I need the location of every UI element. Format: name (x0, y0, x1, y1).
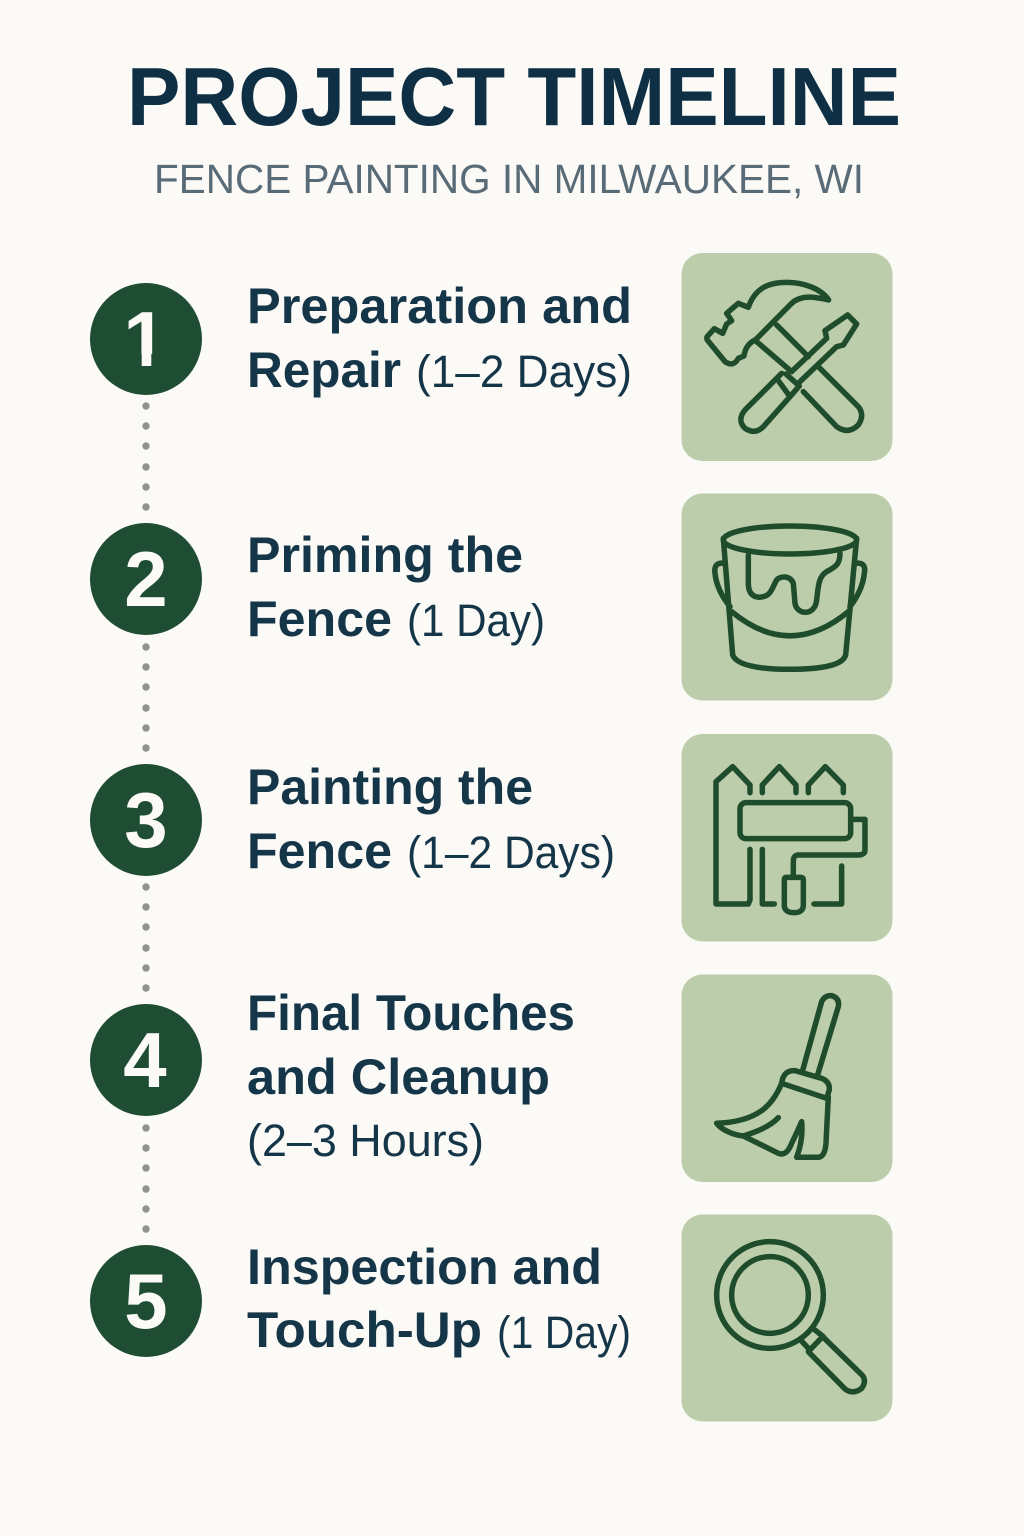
step 4 text: and Cleanup (247, 1049, 550, 1105)
title: PROJECT TIMELINE (127, 50, 901, 143)
step 5 text: (1 Day) (497, 1307, 631, 1358)
step 1 text: Preparation and (247, 278, 632, 334)
step 5 text (247, 1239, 631, 1358)
step 5 number badge (90, 1245, 202, 1357)
step 3 number badge (90, 764, 202, 876)
dotted connector 1-2 (142, 402, 150, 511)
subtitle: FENCE PAINTING IN MILWAUKEE, WI (154, 156, 864, 202)
step 5 icon card: magnifying glass (682, 1214, 892, 1422)
step 4 number badge: 4 (123, 1016, 167, 1104)
step 4 icon card: broom (682, 974, 892, 1182)
dotted connector 3-4 (142, 883, 150, 992)
step 1 number badge: 1 (123, 295, 167, 383)
step 5 text: Inspection and (247, 1239, 602, 1295)
dotted connector 4-5 (142, 1124, 150, 1233)
step 1 number badge (90, 283, 202, 395)
step 3 text (247, 759, 615, 879)
step 2 text (247, 527, 545, 647)
step 3 text: (1–2 Days) (407, 827, 615, 878)
step 2 text: Fence (247, 591, 392, 647)
step 3 text: Painting the (247, 759, 533, 815)
step 1 icon card: hammer and screwdriver (682, 253, 892, 461)
dotted connector 2-3 (142, 643, 150, 752)
step 3 number badge: 3 (124, 776, 168, 864)
step 3 text: Fence (247, 823, 392, 879)
step 2 number badge: 2 (124, 535, 168, 623)
step 5 number badge: 5 (124, 1257, 168, 1345)
step 4 text: (2–3 Hours) (247, 1115, 484, 1166)
step 1 text: Repair (247, 342, 401, 398)
step 3 icon card: fence and paint roller (682, 734, 892, 942)
step 2 icon card: paint bucket (682, 494, 892, 700)
step 2 text: Priming the (247, 527, 523, 583)
step 4 text (247, 985, 575, 1166)
step 5 text: Touch-Up (247, 1302, 482, 1358)
step 1 text (247, 278, 632, 398)
step 4 text: Final Touches (247, 985, 575, 1041)
step 2 text: (1 Day) (407, 595, 545, 646)
step 4 number badge (90, 1004, 202, 1116)
step 1 text: (1–2 Days) (416, 346, 632, 397)
step 2 number badge (90, 523, 202, 635)
